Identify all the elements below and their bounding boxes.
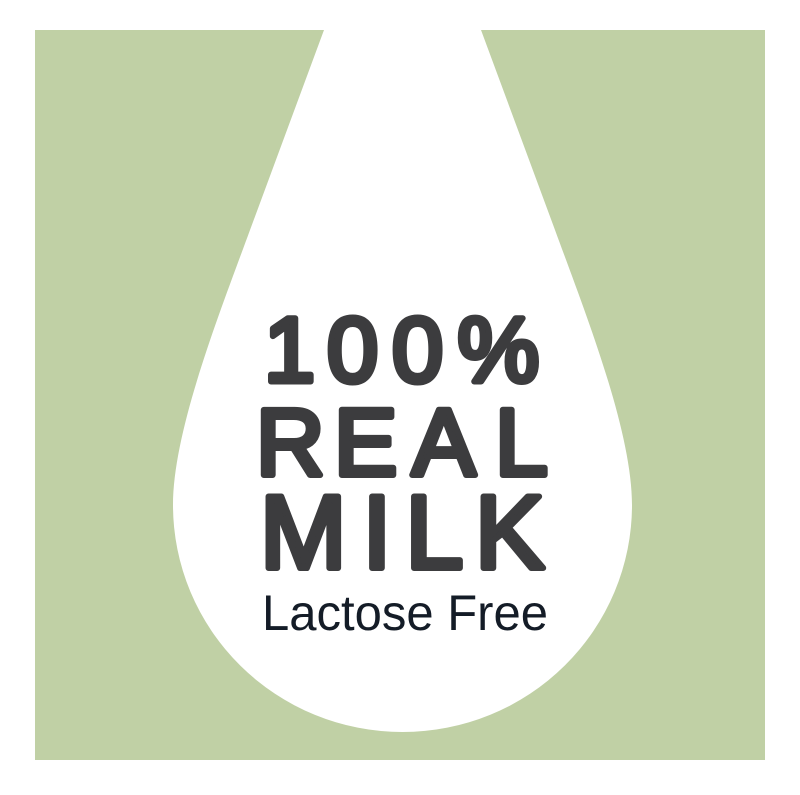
heading: 100%: 100% (264, 300, 539, 402)
heading: REAL: REAL (256, 390, 548, 496)
icon: white milk drop (173, 30, 632, 732)
heading: MILK: MILK (260, 475, 544, 591)
subheading: Lactose Free: Lactose Free (262, 585, 548, 641)
